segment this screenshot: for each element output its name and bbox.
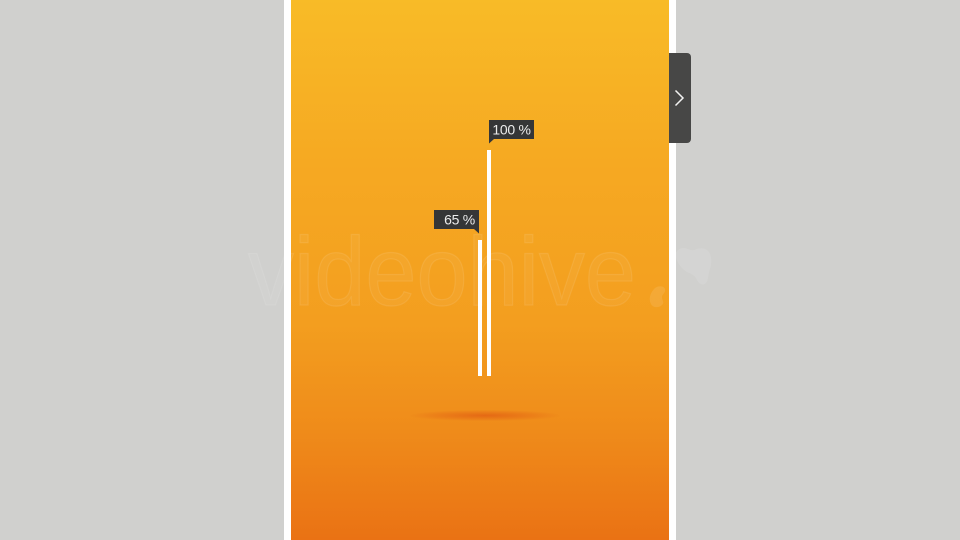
bar: 65 percent [478, 240, 482, 376]
label: 100 percent flag [489, 120, 534, 144]
label: 65 percent flag [434, 210, 479, 234]
bar: 100 percent [487, 150, 491, 376]
label: 65 percent flag: 65 % [444, 212, 475, 228]
panel: orange gradient fill [291, 0, 669, 540]
panel: orange card with white border [284, 0, 676, 540]
label: 100 percent flag: 100 % [492, 122, 531, 138]
chart shadow: ellipse under the bars [410, 410, 560, 421]
navigation tab with chevron [669, 53, 691, 143]
